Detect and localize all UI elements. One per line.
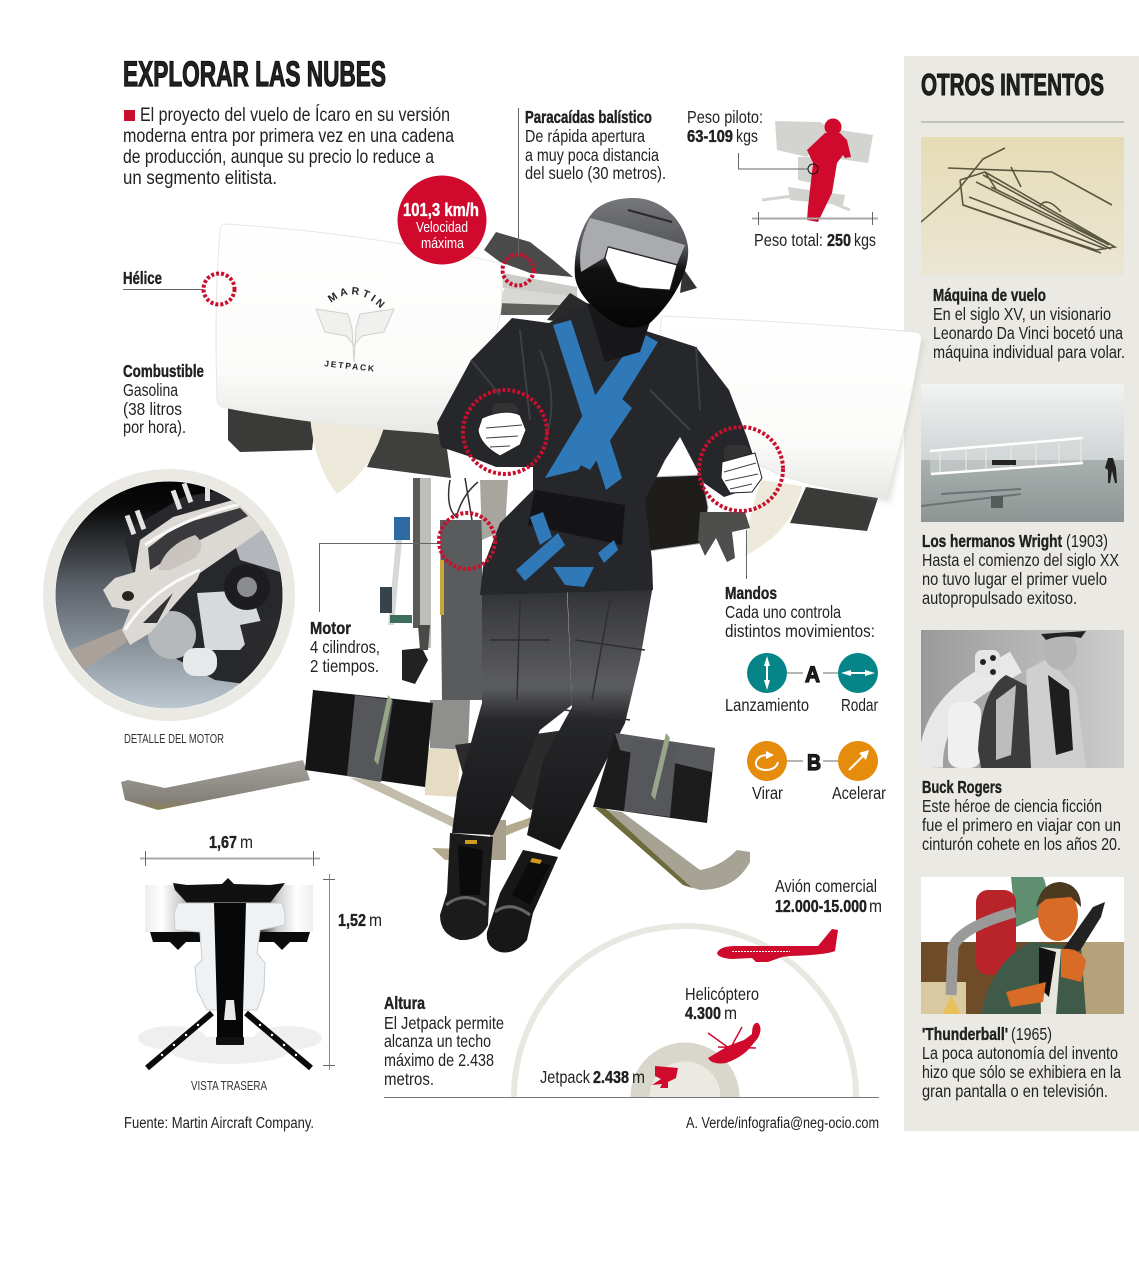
suit legs bbox=[452, 585, 572, 835]
callout: Mandos: Cada uno controla bbox=[725, 602, 841, 622]
weight scale bar bbox=[752, 212, 878, 225]
caption: Los hermanos Wright: (1903) bbox=[1066, 531, 1108, 551]
harness belt bbox=[528, 490, 625, 545]
altitude text: alcanza un techo bbox=[384, 1031, 491, 1051]
rear view caption: VISTA TRASERA bbox=[191, 1079, 268, 1093]
callout: Motor bbox=[310, 513, 495, 676]
callout: Combustible bbox=[123, 361, 204, 437]
controls group A: Lanzamiento bbox=[725, 695, 809, 715]
altitude chart: 4.300 bbox=[685, 1003, 721, 1023]
controls group A: A bbox=[805, 662, 820, 687]
Martin Jetpack logo: JETPACK bbox=[324, 358, 375, 374]
controls group B bbox=[747, 741, 886, 803]
pilot weight diagram: 250 bbox=[827, 230, 851, 250]
controls group B: B bbox=[807, 750, 821, 775]
rear view dimensions: m bbox=[240, 832, 253, 852]
altitude text: metros. bbox=[384, 1069, 434, 1089]
controls group A bbox=[725, 653, 878, 715]
speed badge: Velocidad bbox=[416, 219, 468, 236]
icon: red pilot bbox=[807, 118, 851, 222]
pulley bbox=[183, 648, 217, 676]
rear view of the jetpack bbox=[138, 878, 322, 1068]
carbon fairing behind the head bbox=[484, 232, 573, 277]
callout: Motor: 4 cilindros, bbox=[310, 637, 380, 657]
pilot weight diagram: Peso piloto: bbox=[687, 107, 763, 127]
altitude text: Altura bbox=[384, 993, 425, 1013]
carbon fin right bbox=[593, 733, 715, 823]
speed badge: máxima bbox=[421, 235, 465, 252]
altitude chart bbox=[384, 876, 882, 1098]
caption: Los hermanos Wright: Los hermanos Wright bbox=[922, 531, 1062, 551]
caption: Thunderball: 'Thunderball' bbox=[922, 1024, 1008, 1044]
panel: otros intentos bbox=[904, 56, 1139, 1131]
caption: Los hermanos Wright: no tuvo lugar el primer vuelo bbox=[922, 569, 1107, 589]
icon: roll bbox=[838, 653, 878, 693]
spark plugs bbox=[125, 483, 210, 535]
callout: Hélice: Hélice bbox=[123, 268, 162, 288]
control highlight rings bbox=[463, 390, 783, 511]
altitude chart: Avión comercial bbox=[775, 876, 877, 896]
pilot weight diagram bbox=[687, 107, 878, 250]
left wing underside bbox=[228, 405, 451, 494]
caption: Thunderball: (1965) bbox=[1011, 1024, 1052, 1044]
callout: Mandos: Mandos bbox=[725, 583, 777, 603]
callout: Paracaídas balístico: a muy poca distancia bbox=[525, 145, 659, 165]
callout: Paracaídas balístico: del suelo (30 metros). bbox=[525, 163, 666, 183]
callout: Combustible: por hora). bbox=[123, 417, 186, 437]
engine tubes and machinery bbox=[380, 232, 697, 810]
pilot with suit and harness bbox=[437, 198, 762, 952]
controls group A: Rodar bbox=[841, 695, 878, 715]
title: EXPLORAR LAS NUBES bbox=[123, 55, 386, 94]
caption: Máquina de vuelo: Máquina de vuelo bbox=[933, 285, 1046, 305]
icon: accelerate bbox=[838, 741, 878, 781]
callout: Combustible: (38 litros bbox=[123, 399, 182, 419]
engine block bbox=[123, 490, 290, 690]
left wing bbox=[216, 224, 503, 433]
source: Fuente: Martin Aircraft Company. bbox=[124, 1115, 314, 1132]
icon: turn bbox=[747, 741, 787, 781]
right glove bbox=[721, 445, 762, 493]
intro text block: moderna entra por primera vez en una cadena bbox=[123, 125, 454, 147]
Martin Jetpack logo: MARTIN bbox=[328, 287, 385, 308]
altitude chart: Helicóptero bbox=[685, 984, 759, 1004]
helmet bbox=[575, 198, 688, 328]
callout: Hélice bbox=[123, 268, 234, 304]
altitude chart: Jetpack bbox=[540, 1067, 590, 1087]
callout: Motor: 2 tiempos. bbox=[310, 656, 379, 676]
machinery below right hand bbox=[698, 512, 750, 562]
rear view dimensions: 1,67 bbox=[209, 832, 237, 852]
altitude chart: m bbox=[869, 896, 882, 916]
caption: Máquina de vuelo bbox=[933, 285, 1125, 362]
propeller blade bbox=[70, 628, 127, 670]
speed badge bbox=[398, 176, 486, 264]
callout: Combustible: Gasolina bbox=[123, 380, 178, 400]
photo: Da Vinci sketch bbox=[921, 137, 1124, 275]
intro text block bbox=[123, 103, 454, 189]
carbon fin left bbox=[305, 690, 433, 787]
icon: grey jetpack silhouette bbox=[762, 121, 873, 210]
right wing bbox=[660, 316, 921, 497]
altitude text bbox=[384, 993, 504, 1089]
altitude chart: m bbox=[724, 1003, 737, 1023]
credit: A. Verde/infografia@neg-ocio.com bbox=[686, 1115, 879, 1132]
rear view dimensions: m bbox=[369, 910, 382, 930]
rear view dimensions: 1,52 bbox=[338, 910, 366, 930]
blue harness straps bbox=[516, 320, 658, 587]
pilot weight diagram: kgs bbox=[736, 126, 758, 146]
caption: Thunderball: gran pantalla o en televisión. bbox=[922, 1081, 1108, 1101]
icon: airplane bbox=[717, 929, 838, 962]
controls group B: Virar bbox=[752, 783, 783, 803]
suit jacket bbox=[437, 303, 758, 595]
icon: helicopter bbox=[708, 1023, 760, 1063]
pilot weight diagram: kgs bbox=[854, 230, 876, 250]
Martin Jetpack logo bbox=[315, 287, 395, 374]
rear view dimensions bbox=[140, 832, 382, 1070]
callout: Mandos bbox=[725, 530, 875, 641]
altitude text: El Jetpack permite bbox=[384, 1013, 504, 1033]
caption: Los hermanos Wright: autopropulsado exitoso. bbox=[922, 588, 1077, 608]
gear bbox=[148, 611, 196, 659]
helmet silver band bbox=[580, 218, 685, 272]
icon: pitch bbox=[747, 653, 787, 693]
engine detail circle bbox=[49, 475, 290, 715]
callout: Mandos: distintos movimientos: bbox=[725, 621, 875, 641]
propeller hub bbox=[103, 498, 262, 645]
dark panel under right arm bbox=[633, 475, 708, 553]
left glove bbox=[478, 403, 526, 456]
icon: mini jetpack bbox=[652, 1066, 678, 1088]
caption: Thunderball bbox=[922, 1024, 1121, 1101]
intro text block: El proyecto del vuelo de Ícaro en su versión bbox=[140, 103, 450, 126]
speed badge: 101,3 km/h bbox=[403, 200, 479, 220]
photo: Buck Rogers bbox=[921, 630, 1124, 768]
boots bbox=[440, 833, 493, 940]
neck bbox=[587, 303, 650, 362]
caption: Buck Rogers: Buck Rogers bbox=[922, 777, 1002, 797]
intro text block: de producción, aunque su precio lo reduce a bbox=[123, 146, 434, 168]
photo: Wright brothers bbox=[921, 384, 1124, 522]
intro text block: un segmento elitista. bbox=[123, 167, 277, 189]
callout: Paracaídas balístico: Paracaídas balístico bbox=[525, 107, 652, 127]
callout: Paracaídas balístico bbox=[502, 107, 666, 286]
altitude chart: m bbox=[632, 1067, 645, 1087]
right wing underside bbox=[745, 480, 878, 556]
engine caption: DETALLE DEL MOTOR bbox=[124, 732, 224, 746]
altitude chart: 12.000-15.000 bbox=[775, 896, 867, 916]
altitude chart: 2.438 bbox=[593, 1067, 629, 1087]
base skids of the jetpack bbox=[121, 760, 750, 890]
visor bbox=[605, 247, 677, 290]
helmet vents bbox=[628, 210, 672, 222]
callout: Paracaídas balístico: De rápida apertura bbox=[525, 126, 645, 146]
callout: Combustible: Combustible bbox=[123, 361, 204, 381]
controls group B: Acelerar bbox=[832, 783, 886, 803]
pilot weight diagram: Peso total: bbox=[754, 230, 823, 250]
callout: Motor: Motor bbox=[310, 618, 351, 638]
caption: Buck Rogers bbox=[922, 777, 1121, 854]
altitude text: máximo de 2.438 bbox=[384, 1050, 494, 1070]
right wing shadow bbox=[670, 326, 924, 503]
photo: Thunderball poster bbox=[921, 877, 1124, 1014]
caption: Buck Rogers: Este héroe de ciencia ficción bbox=[922, 796, 1102, 816]
caption: Los hermanos Wright bbox=[922, 531, 1119, 608]
pilot weight diagram: 63-109 bbox=[687, 126, 733, 146]
